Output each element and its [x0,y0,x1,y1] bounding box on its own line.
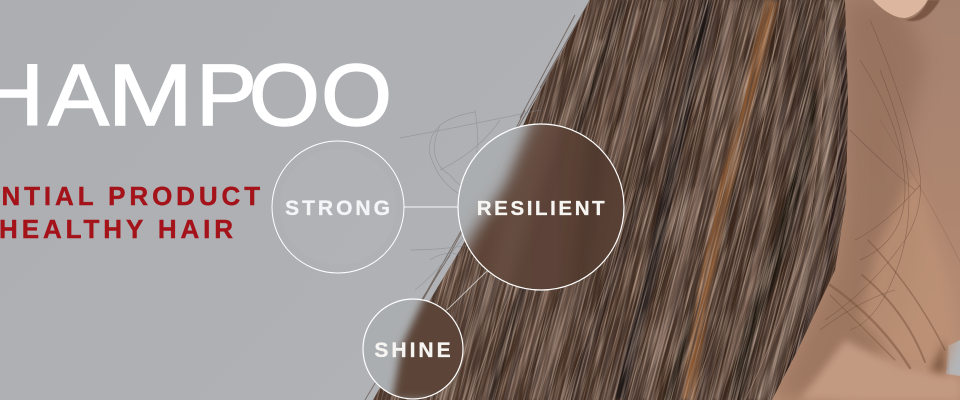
neck creases [830,120,960,368]
title: POO [196,46,392,144]
circle: resilient: RESILIENT [477,197,607,220]
subtitle [0,181,264,244]
photo: skin of neck and shoulder [760,0,960,400]
title [0,46,392,144]
flyaway hairs on background [400,110,540,290]
connector: strong to resilient [404,206,458,208]
circle: strong: STRONG [285,197,393,220]
circle: shine: SHINE [374,339,454,362]
fine texture [375,0,848,400]
circle: strong [272,141,404,273]
ear [873,0,928,18]
title: M [108,47,193,144]
connector: resilient to shine [447,271,487,310]
feathered hair edge [365,0,590,400]
copper streak [688,0,772,400]
broad tonal strands [440,0,843,400]
circle: resilient [457,123,625,291]
circle: shine [362,298,464,400]
photo: long brown hair [373,0,848,400]
flyaway hairs on neck [820,20,921,330]
